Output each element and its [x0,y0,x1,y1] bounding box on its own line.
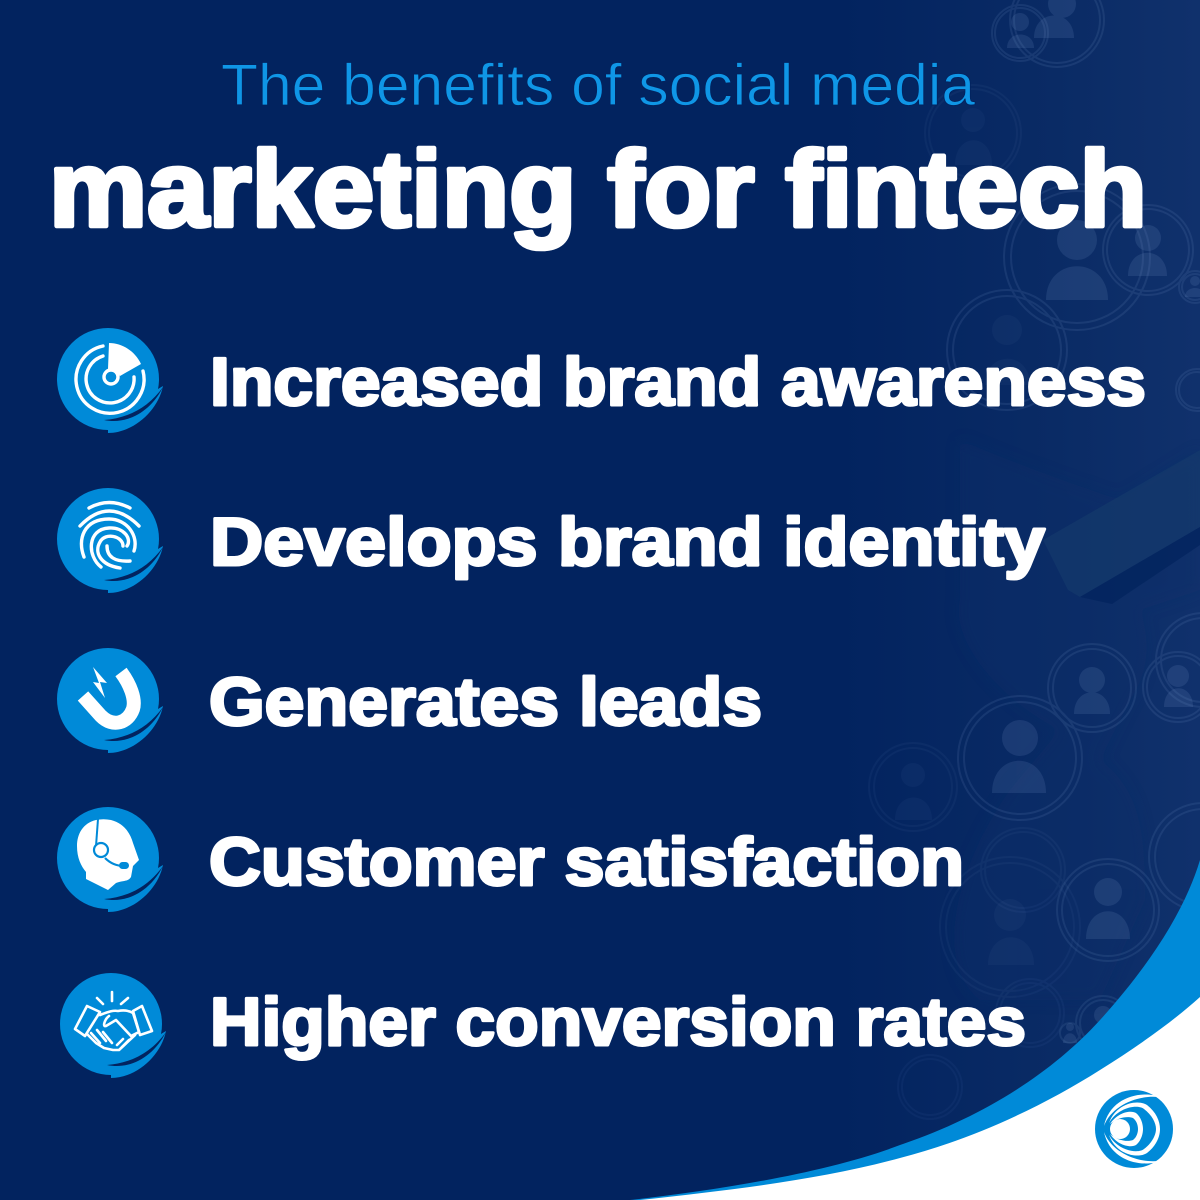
label: Generates leads [209,664,762,740]
blue curve [630,860,1200,1200]
icon: fingerprint [57,488,163,593]
subtitle line: The benefits of social media [221,53,976,118]
person figures [992,0,1200,1043]
main heading: marketing for fintech [49,128,1147,249]
faint person rings [869,85,1080,1119]
label: Develops brand identity [210,504,1045,580]
phone [1044,477,1166,596]
item: increased brand awareness [57,328,1146,433]
icon: radar [57,328,163,433]
faint person figures [895,108,1034,965]
icon: headset head [57,807,163,912]
logo: blue spiral [1095,1090,1173,1168]
person rings [947,0,1200,1050]
title [49,53,1147,249]
white corner [640,997,1200,1200]
label: Customer satisfaction [209,824,964,900]
corner swoosh [630,860,1200,1200]
item: customer satisfaction [57,807,964,912]
label: Increased brand awareness [210,344,1146,420]
hand silhouette [954,440,1200,1000]
phone edge [1080,527,1200,604]
item: generates leads [57,648,762,753]
item: develops brand identity [57,488,1045,593]
label: Higher conversion rates [210,984,1026,1060]
item: higher conversion rates [60,973,1026,1078]
icon: handshake [60,973,166,1078]
background photo: hand holding phone and people network [946,0,1200,1044]
icon: magnet [57,648,163,753]
